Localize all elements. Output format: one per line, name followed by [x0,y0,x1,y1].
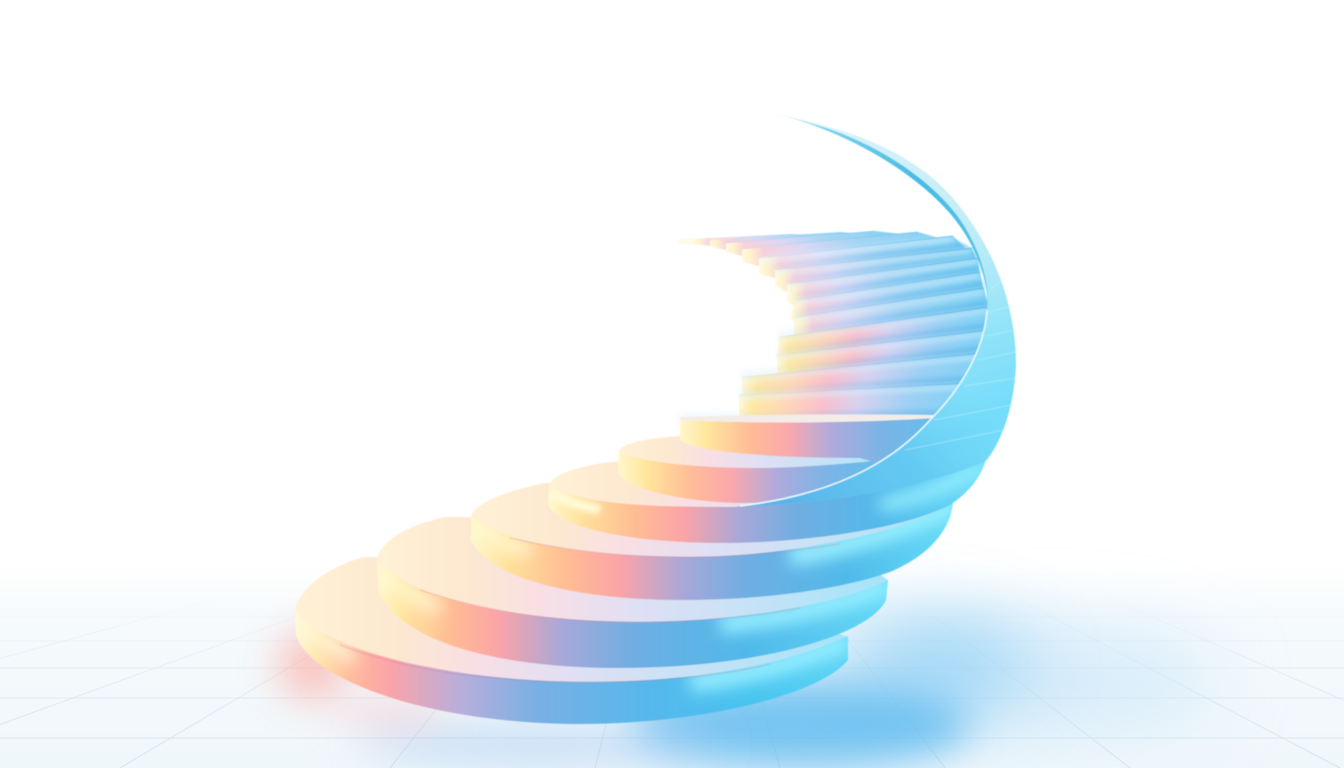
ribbon bright inner line [740,310,987,506]
band bottom shading [680,245,988,417]
floor with perspective grid [0,565,1344,768]
step 1: lowest disc [295,557,850,724]
ribbon inner dark edge [770,113,988,310]
ribbon tread lines [905,278,1016,450]
band edge lines [726,231,988,395]
glow: blue floor reflection [360,623,1220,768]
curved blue ribbon stringer [740,113,1016,506]
glow: pink floor reflection [278,631,450,724]
staircase [295,113,1016,724]
step 4 [548,461,986,544]
step 6 [680,414,950,470]
step 3 [471,480,955,600]
upper stair bands [678,231,990,422]
ribbon lower blue tint [740,310,1016,506]
step 2 [377,517,890,668]
step 5 [618,430,900,503]
band top highlights [739,239,988,398]
